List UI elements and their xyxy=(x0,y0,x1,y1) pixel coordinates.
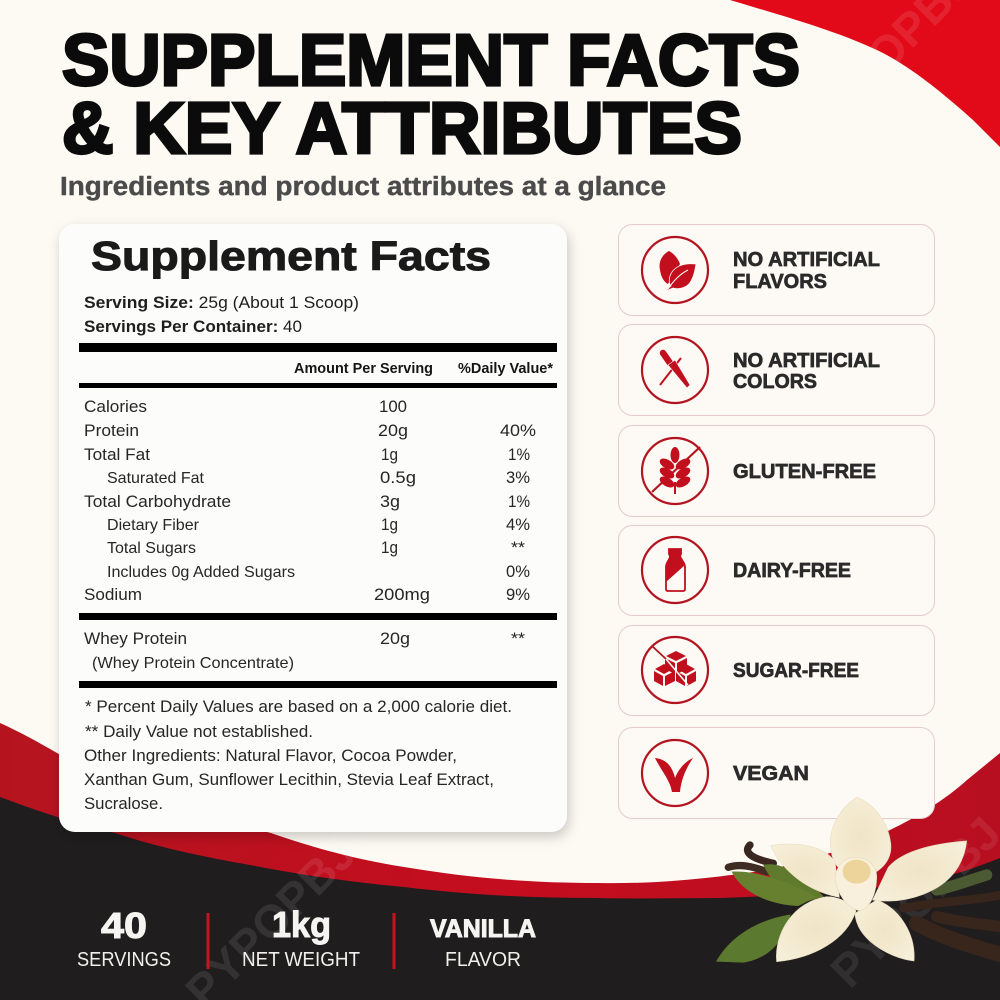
nutrition rows xyxy=(84,397,536,604)
nutrition rows: Includes 0g Added Sugars xyxy=(107,564,295,581)
nutrition rows: Dietary Fiber xyxy=(107,517,200,534)
illustration: vanilla flower and pods xyxy=(716,797,1000,963)
nutrition rows: 1% xyxy=(508,445,530,464)
nutrition rows: 1g xyxy=(381,515,398,534)
bottom dark band xyxy=(0,797,1000,1000)
attribute: sugar free xyxy=(618,626,934,716)
attribute: gluten free: GLUTEN-FREE xyxy=(733,460,876,483)
panel heading: Supplement Facts xyxy=(91,233,491,279)
footnotes: Xanthan Gum, Sunflower Lecithin, Stevia Leaf Extract, xyxy=(84,771,494,789)
panel: supplement facts xyxy=(59,224,567,832)
nutrition rows: Total Carbohydrate xyxy=(84,492,231,511)
nutrition rows: 40% xyxy=(500,421,536,440)
icon: vegan leaf check xyxy=(655,758,693,792)
nutrition rows: 20g xyxy=(378,421,408,440)
icon: crossed dropper xyxy=(660,353,690,388)
table header: Amount Per Serving xyxy=(294,361,433,377)
nutrition rows: 0.5g xyxy=(380,468,416,487)
attribute: no artificial colors: NO ARTIFICIAL xyxy=(733,349,880,372)
whey protein row: ** xyxy=(511,629,525,648)
stat: servings: 40 xyxy=(101,905,147,946)
serving info xyxy=(84,294,359,336)
attribute: no artificial colors xyxy=(618,324,934,416)
attribute: no artificial flavors: FLAVORS xyxy=(733,270,827,293)
whey protein row: Whey Protein xyxy=(84,629,187,648)
icon: crossed wheat xyxy=(652,447,700,494)
serving info: Serving Size: 25g (About 1 Scoop) xyxy=(84,294,359,312)
petals xyxy=(771,797,967,962)
stat: flavor: VANILLA xyxy=(430,915,536,943)
nutrition rows: 1g xyxy=(381,538,398,557)
stat: flavor xyxy=(430,915,536,971)
whey protein row xyxy=(84,629,525,672)
whey protein row: (Whey Protein Concentrate) xyxy=(92,655,294,672)
nutrition rows: Protein xyxy=(84,421,139,440)
footnotes: ** Daily Value not established. xyxy=(85,723,313,741)
icon: crossed sugar cubes xyxy=(652,646,696,686)
title: SUPPLEMENT FACTS xyxy=(62,21,800,101)
nutrition rows: Total Fat xyxy=(84,445,150,464)
leaves xyxy=(716,864,824,963)
card background xyxy=(59,224,567,832)
stat: servings xyxy=(77,905,171,971)
attribute: sugar free: SUGAR-FREE xyxy=(733,659,859,682)
attribute: vegan: VEGAN xyxy=(733,762,809,785)
table header xyxy=(294,361,553,377)
attribute: gluten free xyxy=(618,426,934,516)
nutrition rows: 3g xyxy=(380,492,400,511)
stats bar xyxy=(77,904,536,971)
icon: milk bottle xyxy=(666,549,685,591)
attribute: vegan xyxy=(618,728,934,818)
stat: servings: SERVINGS xyxy=(77,949,171,971)
attribute: dairy free xyxy=(618,526,934,616)
bottom red swoosh xyxy=(0,723,1000,900)
stat: flavor: FLAVOR xyxy=(445,949,521,971)
nutrition rows: Sodium xyxy=(84,585,142,604)
nutrition rows: 1g xyxy=(381,445,398,464)
nutrition rows: 100 xyxy=(379,397,407,416)
nutrition rows: 0% xyxy=(506,562,530,581)
attribute: no artificial colors: COLORS xyxy=(733,370,817,393)
nutrition rows: Total Sugars xyxy=(107,540,196,557)
nutrition rows: Saturated Fat xyxy=(107,470,205,487)
attribute: no artificial flavors xyxy=(618,224,934,316)
stat: net weight: 1kg xyxy=(272,904,331,945)
attribute: dairy free: DAIRY-FREE xyxy=(733,559,851,582)
icon: leaves xyxy=(660,251,696,290)
title xyxy=(62,21,800,169)
nutrition rows: 200mg xyxy=(374,585,430,604)
nutrition rows: Calories xyxy=(84,397,147,416)
whey protein row: 20g xyxy=(380,629,410,648)
attribute: no artificial flavors: NO ARTIFICIAL xyxy=(733,248,880,271)
footnotes: Sucralose. xyxy=(84,795,163,813)
stat: net weight xyxy=(242,904,360,971)
nutrition rows: 1% xyxy=(508,492,530,511)
title: & KEY ATTRIBUTES xyxy=(62,89,742,169)
footnotes xyxy=(84,698,512,813)
subtitle: Ingredients and product attributes at a glance xyxy=(60,173,666,201)
serving info: Servings Per Container: 40 xyxy=(84,318,302,336)
nutrition rows: ** xyxy=(511,538,525,557)
footnotes: Other Ingredients: Natural Flavor, Cocoa Powder, xyxy=(84,747,457,765)
flower center xyxy=(835,857,877,911)
nutrition rows: 9% xyxy=(506,585,530,604)
stat: net weight: NET WEIGHT xyxy=(242,949,360,971)
vanilla pods xyxy=(728,845,1000,955)
footnotes: * Percent Daily Values are based on a 2,000 calorie diet. xyxy=(85,698,512,716)
table header: %Daily Value* xyxy=(458,361,553,377)
nutrition rows: 3% xyxy=(506,468,530,487)
nutrition rows: 4% xyxy=(506,515,530,534)
top right red swoosh xyxy=(730,0,1000,147)
